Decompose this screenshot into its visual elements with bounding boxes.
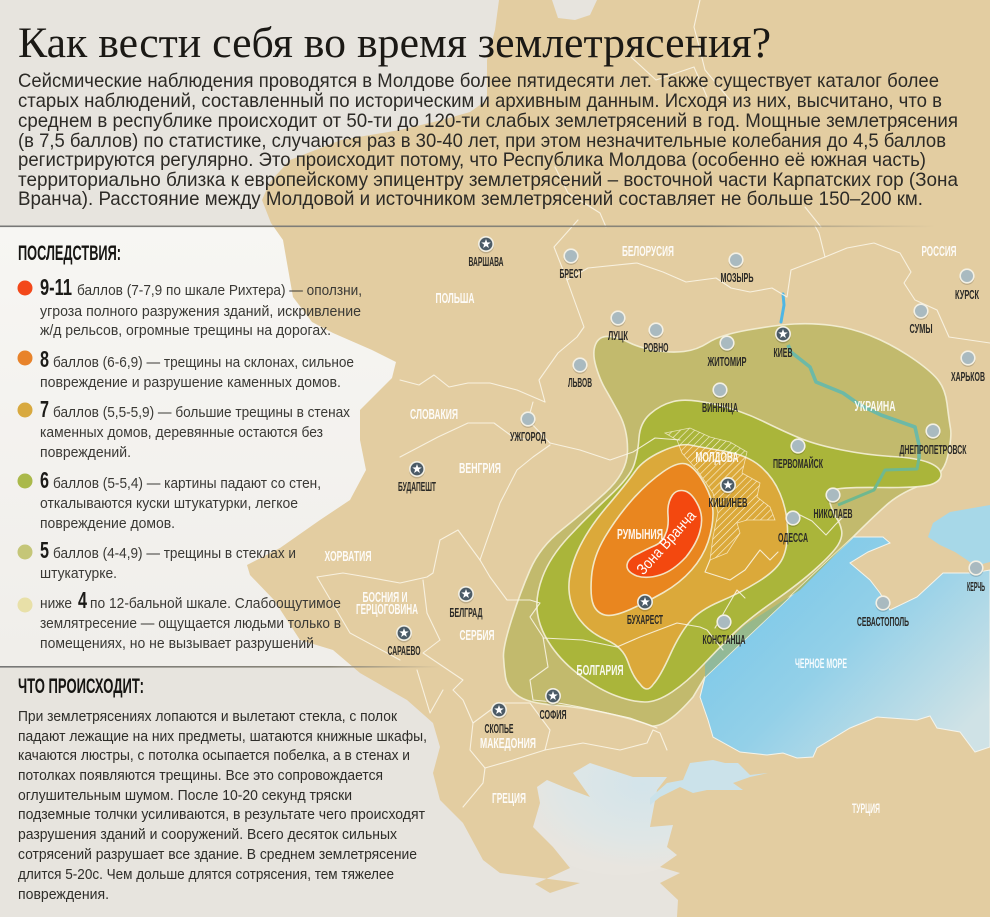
- divider: [0, 666, 440, 668]
- city: Брест: [560, 249, 583, 281]
- legend: 6 points: баллов (5-5,4) — картины падают со стен,: [53, 475, 321, 492]
- legend: 9-11 points: ж/д рельсов, огромные трещины на дорогах.: [40, 322, 331, 339]
- legend: 9-11 points: [18, 274, 362, 339]
- legend: 7 points: каменных домов, деревянные остаются без: [40, 424, 323, 441]
- country labels: ГРЕЦИЯ: [492, 791, 526, 807]
- country labels: ЧЕРНОЕ МОРЕ: [795, 656, 847, 671]
- country labels: БЕЛОРУСИЯ: [622, 244, 674, 260]
- map: country borders: [317, 0, 990, 807]
- country labels: БОЛГАРИЯ: [576, 663, 624, 679]
- country labels: ПОЛЬША: [436, 291, 475, 307]
- city: Днепропетровск: [900, 424, 967, 457]
- legend: 6 points: [18, 467, 321, 532]
- city: Сумы: СУМЫ: [910, 322, 932, 336]
- country labels: УКРАИНА: [854, 399, 896, 415]
- city: Констанца: [702, 615, 746, 647]
- text block: what happens: подземные толчки усиливаются, в результате чего происходят: [18, 806, 425, 823]
- legend: 5 points: 5: [40, 537, 49, 563]
- Aegean sea: [525, 745, 715, 875]
- city: Одесса: [778, 511, 808, 545]
- city: Кишинев: [708, 478, 748, 510]
- text block: what happens: разрушения зданий и сооружений. Всего десяток сильных: [18, 826, 397, 843]
- text block: what happens: [18, 708, 427, 903]
- zone 5 over sea: [705, 537, 853, 677]
- city: Луцк: ЛУЦК: [608, 329, 628, 343]
- city: София: [540, 689, 567, 722]
- city: Севастополь: СЕВАСТОПОЛЬ: [857, 615, 909, 629]
- heading: ПОСЛЕДСТВИЯ: ПОСЛЕДСТВИЯ:: [18, 242, 121, 265]
- city: Курск: [955, 269, 979, 302]
- legend: below 4 points: помещениях, но не вызывает разрушений: [40, 635, 314, 652]
- city: Мозырь: МОЗЫРЬ: [720, 271, 754, 285]
- legend: 7 points: баллов (5,5-5,9) — большие трещины в стенах: [53, 404, 350, 421]
- city: Ужгород: [510, 412, 546, 444]
- map: Sea of Azov: [928, 505, 990, 566]
- legend: below 4 points: землятресение — ощущается людьми только в: [40, 615, 341, 632]
- intro paragraph: (в 7,5 баллов) по статистике, случаются раз в 30-40 лет, при этом незначительные колебания до 4,5 баллов: [18, 130, 946, 152]
- city: Варшава: ВАРШАВА: [468, 255, 504, 269]
- city: Харьков: [951, 351, 985, 384]
- intro paragraph: регистрируются регулярно. Это происходит потому, что Республика Молдова (особенно её южная часть): [18, 149, 926, 171]
- legend: 7 points: [18, 396, 350, 461]
- text block: what happens: качаются люстры, с потолка осыпается побелка, а в стенах и: [18, 747, 410, 764]
- seismic zone: 8 points: [591, 463, 713, 615]
- city: Львов: ЛЬВОВ: [568, 376, 592, 390]
- map: Black Sea: [700, 537, 990, 758]
- city: Белград: [450, 587, 483, 620]
- river: Dnieper over zone 5: [788, 345, 919, 460]
- country labels: [324, 244, 956, 816]
- map: land: [247, 0, 990, 917]
- city: Констанца: КОНСТАНЦА: [702, 633, 746, 647]
- city: Скопье: [484, 703, 514, 736]
- city: Севастополь: [857, 596, 909, 629]
- legend: 5 points: штукатурке.: [40, 565, 117, 582]
- map: Sea of Marmara: [650, 760, 768, 805]
- divider: [0, 226, 935, 227]
- city: Керчь: [967, 561, 985, 594]
- city: Белград: БЕЛГРАД: [450, 606, 483, 620]
- seismic zone: 9-11 points, Vrancea: [627, 490, 702, 577]
- intro paragraph: [18, 70, 958, 210]
- city: Первомайск: [773, 439, 823, 471]
- city: Николаев: НИКОЛАЕВ: [814, 507, 852, 521]
- intro paragraph: Вранча). Расстояние между Молдовой и источником землетрясений составляет не больше 150–200 км.: [18, 188, 923, 210]
- heading: ЧТО ПРОИСХОДИТ: ЧТО ПРОИСХОДИТ:: [18, 675, 144, 698]
- city: Луцк: [608, 311, 628, 343]
- legend: 6 points: повреждение домов.: [40, 515, 175, 532]
- country labels: МОЛДОВА: [696, 450, 739, 466]
- seismic zone: 5 points: [503, 324, 951, 726]
- legend: 9-11 points: 9-11: [40, 274, 72, 300]
- legend: 7 points: повреждений.: [40, 444, 131, 461]
- intro paragraph: старых наблюдений, составленный по историческим и архивным данным. Исходя из них, высчитано, что в: [18, 90, 942, 112]
- country labels: СЕРБИЯ: [460, 628, 494, 644]
- seismic zone: 7 points: [569, 445, 788, 689]
- seismic zone: 6 points: [537, 400, 941, 702]
- city: Ровно: [644, 323, 669, 355]
- legend: 6 points: откалываются куски штукатурки, легкое: [40, 495, 298, 512]
- label: Зона Вранча: Зона Вранча: [634, 507, 700, 578]
- city: Киев: КИЕВ: [774, 346, 792, 360]
- country labels: ГЕРЦОГОВИНА: [356, 602, 418, 618]
- text block: what happens: повреждения.: [18, 886, 109, 903]
- city: Скопье: СКОПЬЕ: [484, 722, 514, 736]
- intro paragraph: Сейсмические наблюдения проводятся в Молдове более пятидесяти лет. Также существует каталог более: [18, 70, 939, 92]
- legend: 8 points: баллов (6-6,9) — трещины на склонах, сильное: [53, 354, 354, 371]
- city: Житомир: ЖИТОМИР: [707, 355, 746, 369]
- city: Бухарест: БУХАРЕСТ: [627, 613, 663, 627]
- text block: what happens: сотрясений разрушает все здание. В среднем землетрясение: [18, 846, 417, 863]
- city: Ужгород: УЖГОРОД: [510, 430, 546, 444]
- city: Будапешт: [398, 462, 436, 494]
- city: София: СОФИЯ: [540, 708, 567, 722]
- intro paragraph: территориально близка к европейскому эпицентру землетрясений – восточной части Карпатских гор (Зона: [18, 169, 958, 191]
- legend: 8 points: повреждение и разрушение каменных домов.: [40, 374, 341, 391]
- legend: 5 points: баллов (4-4,9) — трещины в стеклах и: [53, 545, 296, 562]
- city: Первомайск: ПЕРВОМАЙСК: [773, 456, 823, 471]
- city: Брест: БРЕСТ: [560, 267, 583, 281]
- text block: what happens: При землетрясениях лопаются и вылетают стекла, с полок: [18, 708, 397, 725]
- legend: 8 points: [18, 346, 354, 391]
- city: Киев: [774, 327, 792, 360]
- country labels: СЛОВАКИЯ: [410, 407, 458, 423]
- city: Житомир: [707, 336, 746, 369]
- city: Ровно: РОВНО: [644, 341, 669, 355]
- text block: what happens: потолках появляются трещины. Все это сопровождается: [18, 767, 383, 784]
- country labels: ТУРЦИЯ: [852, 801, 880, 816]
- text block: what happens: длится 5-20с. Чем дольше длятся сотрясения, тем тяжелее: [18, 866, 394, 883]
- title: Как вести себя во время землетрясения?: [18, 20, 771, 67]
- legend: below 4 points: ниже: [40, 595, 72, 612]
- country labels: ВЕНГРИЯ: [459, 461, 501, 477]
- city: Львов: [568, 358, 592, 390]
- city: Будапешт: БУДАПЕШТ: [398, 480, 436, 494]
- legend: 7 points: 7: [40, 396, 49, 422]
- text block: what happens: оглушительным шумом. После 10-20 секунд тряски: [18, 787, 352, 804]
- legend: 8 points: 8: [40, 346, 49, 372]
- cities: [388, 237, 985, 736]
- city: Варшава: [468, 237, 504, 269]
- city: Винница: [702, 383, 738, 415]
- city: Мозырь: [720, 253, 754, 285]
- text block: what happens: падают лежащие на них предметы, шатаются книжные шкафы,: [18, 728, 427, 745]
- river: upper Dnieper: [781, 294, 784, 322]
- legend: 6 points: 6: [40, 467, 49, 493]
- city: Николаев: [814, 488, 852, 521]
- country labels: БОСНИЯ И: [362, 590, 408, 606]
- city: Сумы: [910, 304, 932, 336]
- legend: below 4 points: [18, 587, 341, 652]
- legend: 9-11 points: баллов (7-7,9 по шкале Рихтера) — оползни,: [77, 282, 362, 299]
- country labels: ХОРВАТИЯ: [324, 549, 372, 565]
- Moldova hatched territory: [665, 428, 775, 560]
- city: Винница: ВИННИЦА: [702, 401, 738, 415]
- intro paragraph: среднем в республике происходит от 50-ти до 120-ти слабых землетрясений в год. Мощные землетрясения: [18, 110, 958, 132]
- country labels: РОССИЯ: [922, 244, 956, 260]
- city: Сараево: САРАЕВО: [388, 644, 421, 658]
- city: Кишинев: КИШИНЕВ: [708, 496, 748, 510]
- legend: below 4 points: 4: [78, 587, 87, 613]
- legend: 5 points: [18, 537, 296, 582]
- river: lower Dnieper: [838, 458, 919, 505]
- legend: 9-11 points: угроза полного разружения зданий, искривление: [40, 303, 361, 320]
- legend: below 4 points: по 12-бальной шкале. Слабоощутимое: [90, 595, 341, 612]
- city: Одесса: ОДЕССА: [778, 531, 808, 545]
- country labels: МАКЕДОНИЯ: [480, 736, 536, 752]
- city: Сараево: [388, 626, 421, 658]
- city: Бухарест: [627, 595, 663, 627]
- country labels: РУМЫНИЯ: [617, 527, 663, 543]
